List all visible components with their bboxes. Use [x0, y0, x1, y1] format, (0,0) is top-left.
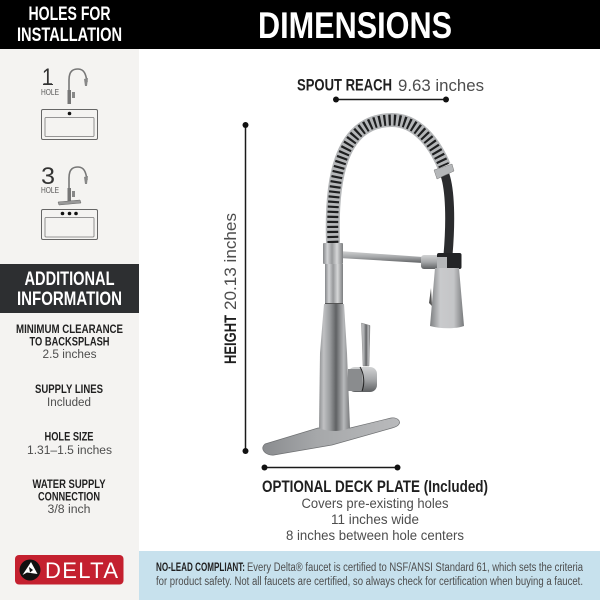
text: supply lines	[35, 382, 103, 409]
text: supply lines: SUPPLY LINES	[35, 382, 103, 396]
text: water supply connection: CONNECTION	[38, 490, 100, 504]
logo: delta: DELTA	[45, 558, 118, 583]
icon: one hole installation: HOLE	[41, 88, 59, 97]
text: optional deck plate	[262, 478, 488, 543]
horizontal arm	[339, 251, 423, 263]
text: hole size: 1.31–1.5 inches	[27, 445, 112, 457]
text: hole size	[27, 430, 112, 457]
spring coil	[333, 120, 444, 243]
header: holes for installation: INSTALLATION	[17, 25, 122, 46]
text: minimum clearance: 2.5 inches	[42, 349, 97, 361]
icon: three hole installation	[41, 163, 98, 240]
title: dimensions	[139, 0, 600, 49]
text: optional deck plate: 11 inches wide	[331, 511, 419, 527]
text: minimum clearance: MINIMUM CLEARANCE	[16, 322, 123, 336]
illustration: faucet	[263, 120, 464, 455]
text: hole size: HOLE SIZE	[44, 430, 94, 444]
text: supply lines: Included	[47, 397, 91, 409]
icon: one hole installation	[41, 64, 98, 140]
heading: additional information	[0, 264, 139, 313]
text: optional deck plate: 8 inches between hole centers	[286, 527, 464, 543]
text: optional deck plate: Covers pre-existing holes	[302, 495, 448, 511]
text: optional deck plate: OPTIONAL DECK PLATE (Included)	[262, 478, 488, 496]
spray head	[430, 268, 464, 328]
label: height	[221, 213, 240, 364]
icon: three hole installation: HOLE	[41, 186, 59, 195]
label: height: 20.13 inches	[221, 213, 240, 310]
callout: no-lead compliant	[139, 551, 600, 600]
collar	[323, 243, 343, 264]
icon: one hole installation: 1	[42, 64, 53, 91]
icon: three hole installation: 3	[41, 163, 55, 190]
text: water supply connection: 3/8 inch	[48, 504, 90, 516]
header: holes for installation	[0, 0, 139, 49]
label: spout reach	[297, 76, 484, 95]
text: water supply connection	[32, 477, 106, 516]
text: minimum clearance	[16, 322, 123, 361]
text: minimum clearance: TO BACKSPLASH	[30, 334, 110, 348]
black hose	[445, 175, 450, 255]
heading: additional information: ADDITIONAL	[24, 269, 115, 290]
panel: left sidebar background	[0, 0, 139, 600]
arrow: height dimension line	[242, 122, 248, 454]
logo: delta	[15, 555, 124, 584]
spring end cap	[434, 164, 454, 179]
upper column	[325, 264, 343, 304]
handle lever	[362, 323, 370, 366]
label: height: HEIGHT	[222, 315, 240, 364]
label: spout reach: 9.63 inches	[398, 76, 484, 95]
text: water supply connection: WATER SUPPLY	[32, 477, 106, 491]
deck plate	[263, 418, 400, 455]
callout: no-lead compliant: NO-LEAD COMPLIANT:	[156, 562, 245, 574]
tapered body	[319, 304, 350, 431]
heading: additional information: INFORMATION	[17, 289, 122, 310]
arrow: deck plate dimension line	[262, 464, 400, 470]
label: spout reach: SPOUT REACH	[297, 76, 392, 94]
handle hub	[348, 367, 377, 392]
black connector	[437, 253, 462, 269]
title: dimensions: DIMENSIONS	[258, 5, 452, 46]
arrow: spout reach dimension line	[333, 96, 449, 102]
header: holes for installation: HOLES FOR	[28, 4, 111, 25]
